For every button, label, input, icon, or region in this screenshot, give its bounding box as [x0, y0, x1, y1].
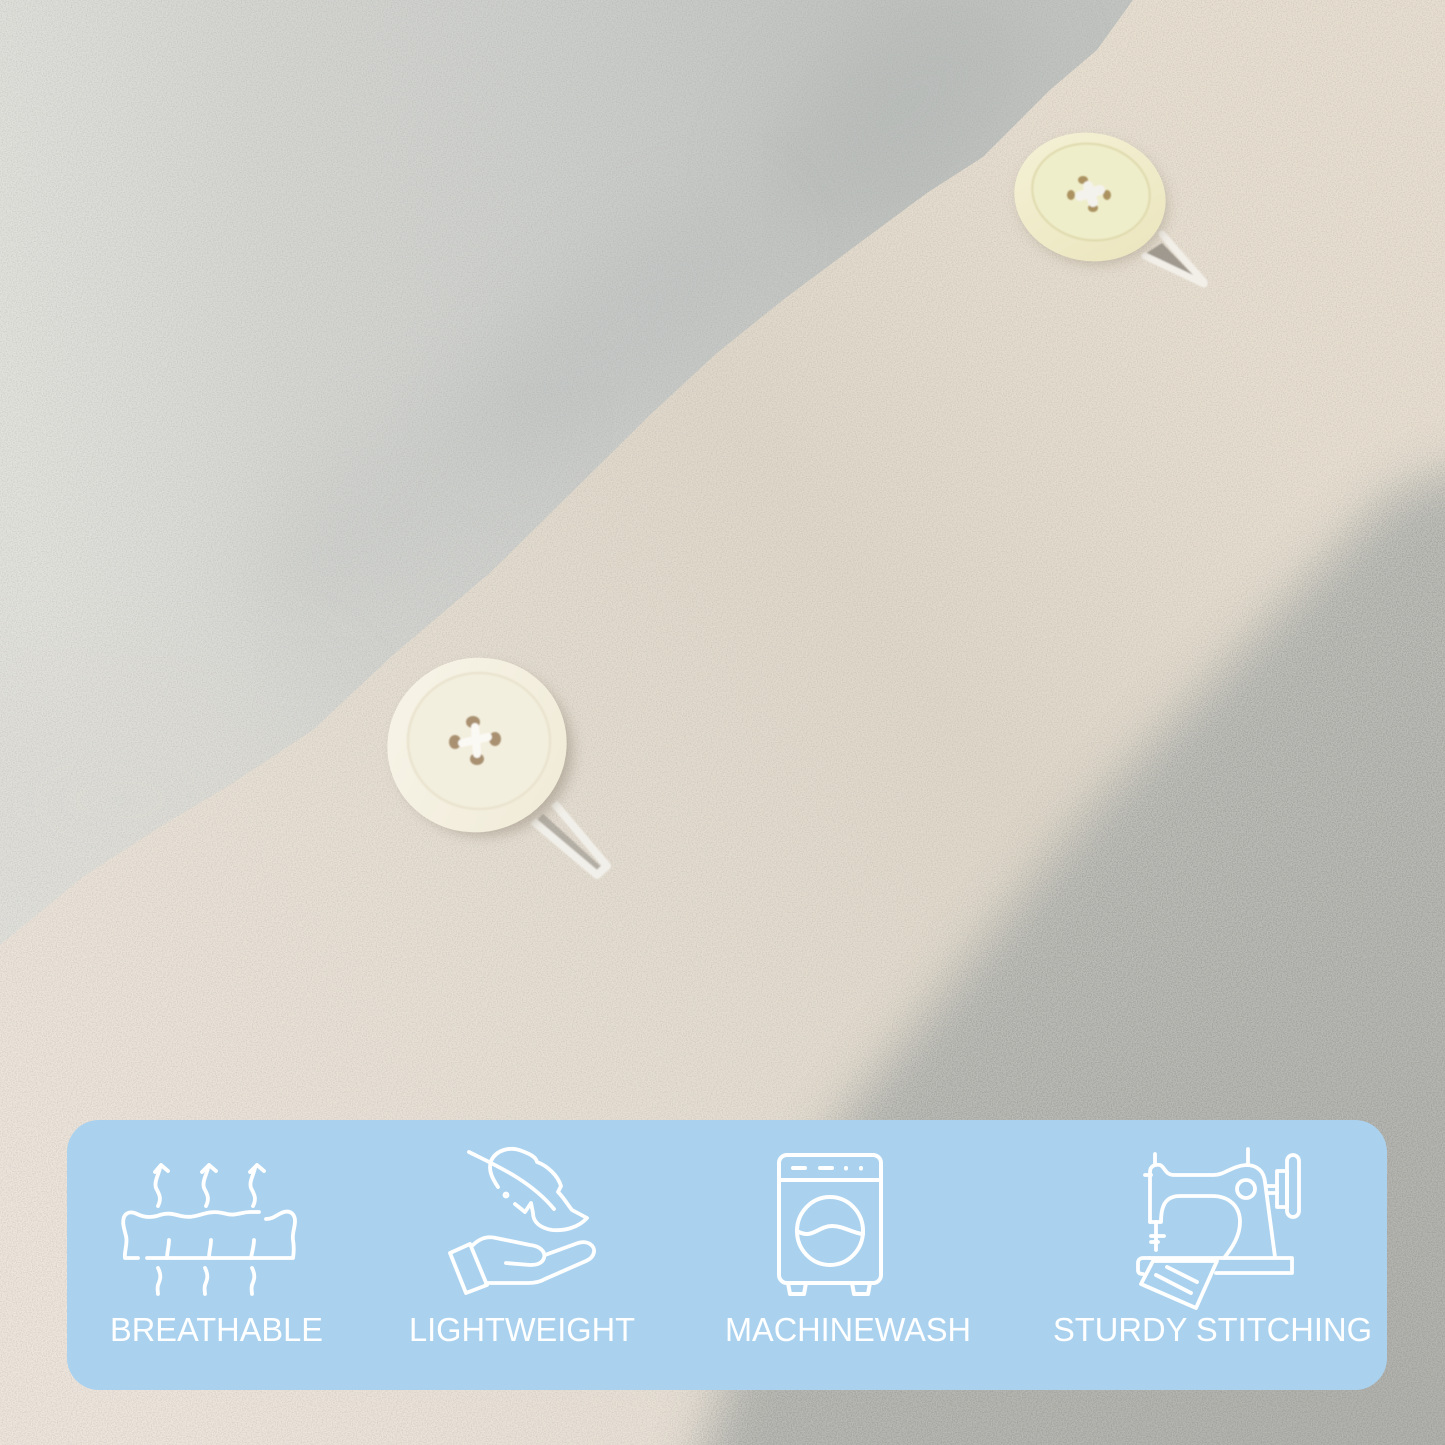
label: sturdy stitching: STURDY STITCHING — [1053, 1311, 1372, 1348]
button body — [363, 632, 591, 858]
button holes and thread — [449, 716, 501, 765]
darker weave texture in shaded fabric — [698, 466, 1445, 1445]
label: lightweight: LIGHTWEIGHT — [409, 1311, 635, 1348]
icon: feather over hand — [450, 1149, 594, 1293]
label: breathable: BREATHABLE — [110, 1311, 323, 1348]
icon: breathable pillow — [123, 1165, 295, 1294]
buttonhole stitching — [533, 803, 607, 875]
button body — [1004, 121, 1176, 273]
buttonhole stitching — [1145, 234, 1204, 284]
small button with buttonhole — [1004, 121, 1204, 284]
large button with buttonhole — [363, 632, 607, 875]
label: machine wash: MACHINEWASH — [725, 1311, 971, 1348]
feature panel — [67, 1120, 1387, 1390]
background: grey upper fabric — [0, 0, 1133, 944]
icon: washing machine — [779, 1155, 881, 1294]
icon: sewing machine — [1138, 1149, 1299, 1308]
button holes and thread — [1067, 176, 1111, 212]
